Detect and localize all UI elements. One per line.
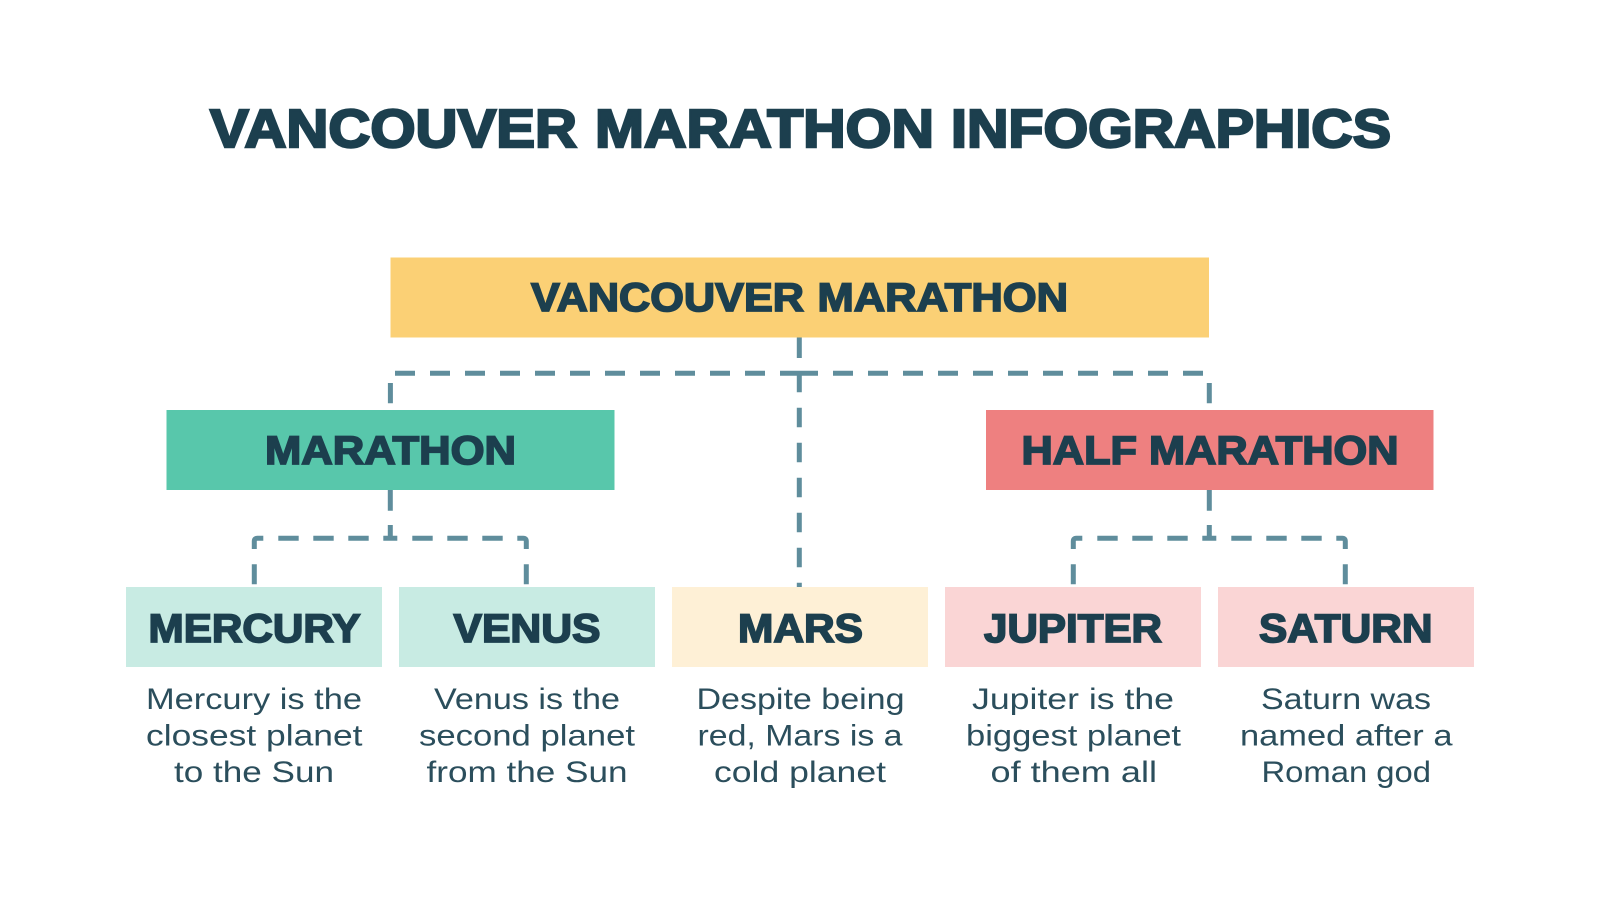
description: Jupiter: biggest planet: [966, 720, 1181, 752]
description: Saturn: named after a: [1240, 720, 1453, 752]
root box: Vancouver Marathon: MARATHON: [818, 276, 1068, 320]
description: Venus: [419, 683, 635, 789]
label box: Mercury: MERCURY: [148, 607, 361, 651]
column: Mars: [672, 587, 928, 789]
description: Saturn: Roman god: [1262, 756, 1431, 789]
branch box: Marathon: MARATHON: [265, 429, 516, 473]
description: Jupiter: [966, 683, 1181, 789]
column: Mercury: [126, 587, 382, 789]
label box: Saturn: [1218, 587, 1474, 667]
connector: root to branches: [390, 337, 1209, 587]
title: MARATHON: [595, 100, 934, 159]
root box: Vancouver Marathon: [390, 258, 1209, 338]
branch box: Half Marathon: [986, 410, 1434, 490]
description: Mercury: to the Sun: [174, 756, 334, 789]
connector: marathon to mercury and venus: [254, 490, 526, 584]
label box: Saturn: SATURN: [1259, 607, 1432, 651]
description: Saturn: Saturn was: [1261, 683, 1431, 716]
description: Saturn: [1240, 683, 1453, 789]
label box: Venus: VENUS: [454, 607, 600, 651]
description: Jupiter: of them all: [990, 756, 1157, 789]
root box: Vancouver Marathon: VANCOUVER: [531, 276, 804, 320]
description: Venus: from the Sun: [426, 756, 628, 789]
description: Mercury: closest planet: [146, 720, 362, 752]
description: Mars: cold planet: [714, 756, 886, 789]
description: Mars: Despite being: [696, 683, 904, 716]
description: Jupiter: Jupiter is the: [972, 683, 1174, 716]
column: Venus: [399, 587, 655, 789]
title: VANCOUVER: [210, 100, 577, 159]
connector: half marathon to jupiter and saturn: [1073, 490, 1345, 584]
description: Mars: red, Mars is a: [698, 720, 903, 752]
label box: Mars: MARS: [738, 607, 863, 651]
label box: Mercury: [126, 587, 382, 667]
title: [210, 100, 1391, 159]
label box: Mars: [672, 587, 928, 667]
description: Mercury: [146, 683, 362, 789]
label box: Jupiter: JUPITER: [984, 607, 1162, 651]
column: Saturn: [1218, 587, 1474, 789]
description: Venus: second planet: [419, 720, 635, 752]
label box: Venus: [399, 587, 655, 667]
branch box: Half Marathon: HALF MARATHON: [1022, 429, 1398, 473]
title: INFOGRAPHICS: [951, 100, 1391, 159]
column: Jupiter: [945, 587, 1201, 789]
description: Venus: Venus is the: [434, 683, 620, 716]
description: Mercury: Mercury is the: [146, 683, 362, 716]
description: Mars: [696, 683, 904, 789]
label box: Jupiter: [945, 587, 1201, 667]
branch box: Marathon: [166, 410, 614, 490]
